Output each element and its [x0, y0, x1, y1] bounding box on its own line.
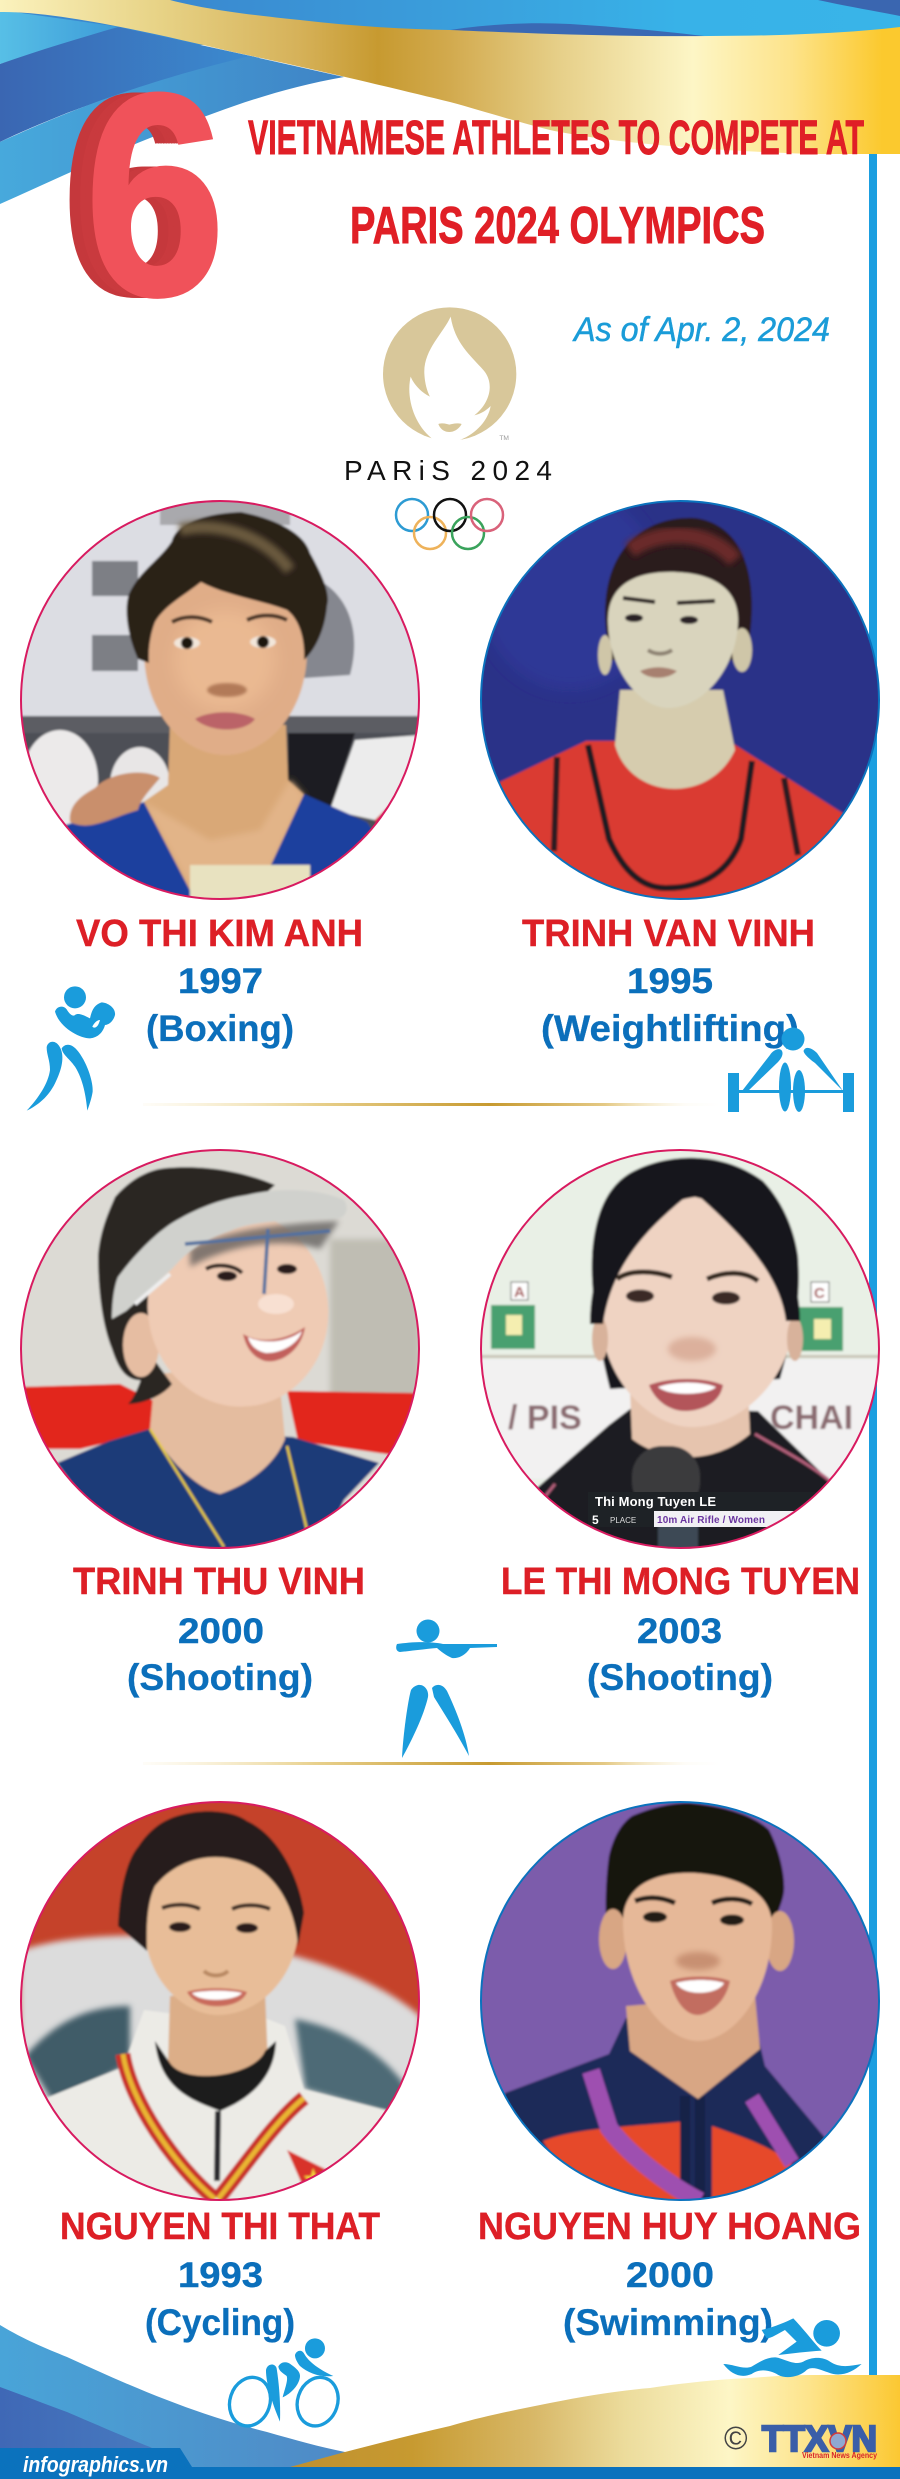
features [635, 1898, 752, 1904]
straps [588, 745, 752, 888]
face [144, 570, 307, 755]
red shirt [499, 739, 844, 898]
big number 6: 6 [84, 33, 226, 357]
athlete photo: Vo Thi Kim Anh [20, 500, 420, 905]
date note: As of Apr. 2, 2024 [572, 311, 830, 349]
title line 2: PARIS 2024 OLYMPICS [350, 197, 765, 255]
hand on shoulder [70, 773, 160, 825]
hair [127, 512, 328, 663]
features [162, 1905, 270, 1909]
right vertical bar [869, 154, 877, 2379]
facial features [172, 617, 212, 622]
birth year 1993: 1993 [178, 2256, 263, 2295]
targets [491, 1305, 535, 1349]
banner text: / PIS [508, 1399, 582, 1437]
sport: Cycling: (Cycling) [145, 2302, 295, 2343]
fringe [588, 1198, 683, 1326]
olympic rings [396, 499, 503, 549]
neck [626, 1996, 760, 2099]
website: infographics.vn [23, 2452, 168, 2477]
icon: weightlifting [728, 1028, 854, 1112]
sport: Boxing: (Boxing) [146, 1008, 294, 1049]
divider row 2 [143, 1762, 720, 1765]
jacket [20, 2010, 420, 2201]
face [608, 572, 738, 708]
source tab [0, 2448, 192, 2477]
emblem: flame and face: TM [499, 435, 509, 442]
sport: Shooting: (Shooting) [127, 1657, 313, 1698]
orange lower panels [543, 2121, 685, 2201]
footer waves [0, 2325, 900, 2479]
athlete name: Trinh Thu Vinh: TRINH THU VINH [73, 1561, 365, 1603]
agency name: Vietnam News Agency [802, 2450, 877, 2460]
athlete name: Nguyen Thi That: NGUYEN THI THAT [60, 2206, 380, 2248]
flag badge [287, 2150, 339, 2196]
birth year 1995: 1995 [627, 962, 713, 1001]
face [146, 1221, 329, 1407]
birth year 2003: 2003 [637, 1612, 722, 1651]
blue shirt [66, 801, 191, 896]
broadcast caption: Thi Mong Tuyen LE [595, 1494, 716, 1509]
collar [155, 2041, 276, 2111]
neck [630, 1389, 750, 1457]
features [206, 1266, 242, 1273]
athlete name: Trinh Van Vinh: TRINH VAN VINH [522, 913, 815, 955]
wordmark: PARiS 2024 [344, 455, 552, 486]
hair back [592, 1158, 799, 1389]
hair [118, 1811, 304, 1951]
sport: Shooting: (Shooting) [587, 1657, 773, 1698]
neck [615, 690, 735, 789]
birth year 2000: 2000 [178, 1612, 264, 1651]
icon: swimming [723, 2318, 862, 2377]
face [144, 1847, 299, 2015]
athlete photo: Le Thi Mong Tuyen: A [514, 1284, 525, 1301]
athlete photo: Le Thi Mong Tuyen [480, 1149, 880, 1554]
features [623, 598, 715, 603]
icon: cycling [223, 2338, 344, 2431]
broadcast caption: PLACE [610, 1516, 636, 1525]
neck [168, 1991, 268, 2080]
athlete name: Le Thi Mong Tuyen: LE THI MONG TUYEN [501, 1561, 860, 1603]
athlete photo: Trinh Van Vinh [480, 490, 880, 900]
athlete name: Vo Thi Kim Anh: VO THI KIM ANH [76, 913, 363, 955]
icon: shooting [396, 1620, 497, 1758]
athlete photo: Le Thi Mong Tuyen: C [814, 1285, 825, 1302]
TTXVN wordmark: TTXVN [762, 2418, 877, 2459]
divider row 1 [143, 1103, 720, 1106]
Paris 2024 logo [344, 307, 552, 549]
sport: Swimming: (Swimming) [563, 2302, 773, 2343]
features [617, 1272, 758, 1281]
shirt [57, 1429, 379, 1549]
hair [98, 1167, 275, 1380]
ear [123, 1313, 159, 1377]
visor [112, 1190, 347, 1319]
copyright mark: © [724, 2420, 748, 2456]
medal ribbon [591, 2071, 700, 2201]
neck and chest [143, 724, 306, 890]
background target ring [25, 2006, 130, 2106]
athlete photo: Trinh Thu Vinh [20, 1149, 420, 1549]
neck [150, 1364, 285, 1494]
red padding [20, 1384, 165, 1449]
necklace [150, 1429, 307, 1547]
copyright and agency logo [724, 2418, 877, 2460]
jacket [537, 1408, 828, 1546]
microphone [631, 1444, 701, 1492]
broadcast caption [592, 1492, 794, 1527]
ears [599, 1909, 627, 1969]
hair mass [605, 518, 752, 660]
face [600, 1197, 795, 1427]
hair mass [606, 1803, 784, 1931]
sight glasses [185, 1229, 330, 1294]
target labels [511, 1282, 528, 1300]
athlete photo: Nguyen Huy Hoang [480, 1801, 880, 2201]
card [190, 865, 310, 905]
globe emblem [830, 2433, 846, 2449]
icon: boxing [27, 986, 115, 1111]
face [623, 1873, 772, 2041]
header wave background [0, 0, 900, 204]
shade under visor [190, 1221, 339, 1267]
medal ribbon [123, 2054, 304, 2199]
ears [732, 628, 752, 672]
athlete name: Nguyen Huy Hoang: NGUYEN HUY HOANG [478, 2206, 861, 2248]
jacket [480, 2018, 880, 2201]
birth year 2000: 2000 [626, 2256, 714, 2295]
broadcast caption: 5 [592, 1513, 599, 1527]
zipper [217, 2111, 218, 2181]
emblem: flame and face [383, 307, 516, 443]
athlete photo: Le Thi Mong Tuyen: CHAI [770, 1399, 853, 1437]
broadcast caption: 10m Air Rifle / Women [657, 1515, 765, 1526]
sport: Weightlifting: (Weightlifting) [541, 1008, 799, 1049]
birth year 1997: 1997 [178, 962, 263, 1001]
athlete photo: Nguyen Thi That [20, 1801, 420, 2201]
